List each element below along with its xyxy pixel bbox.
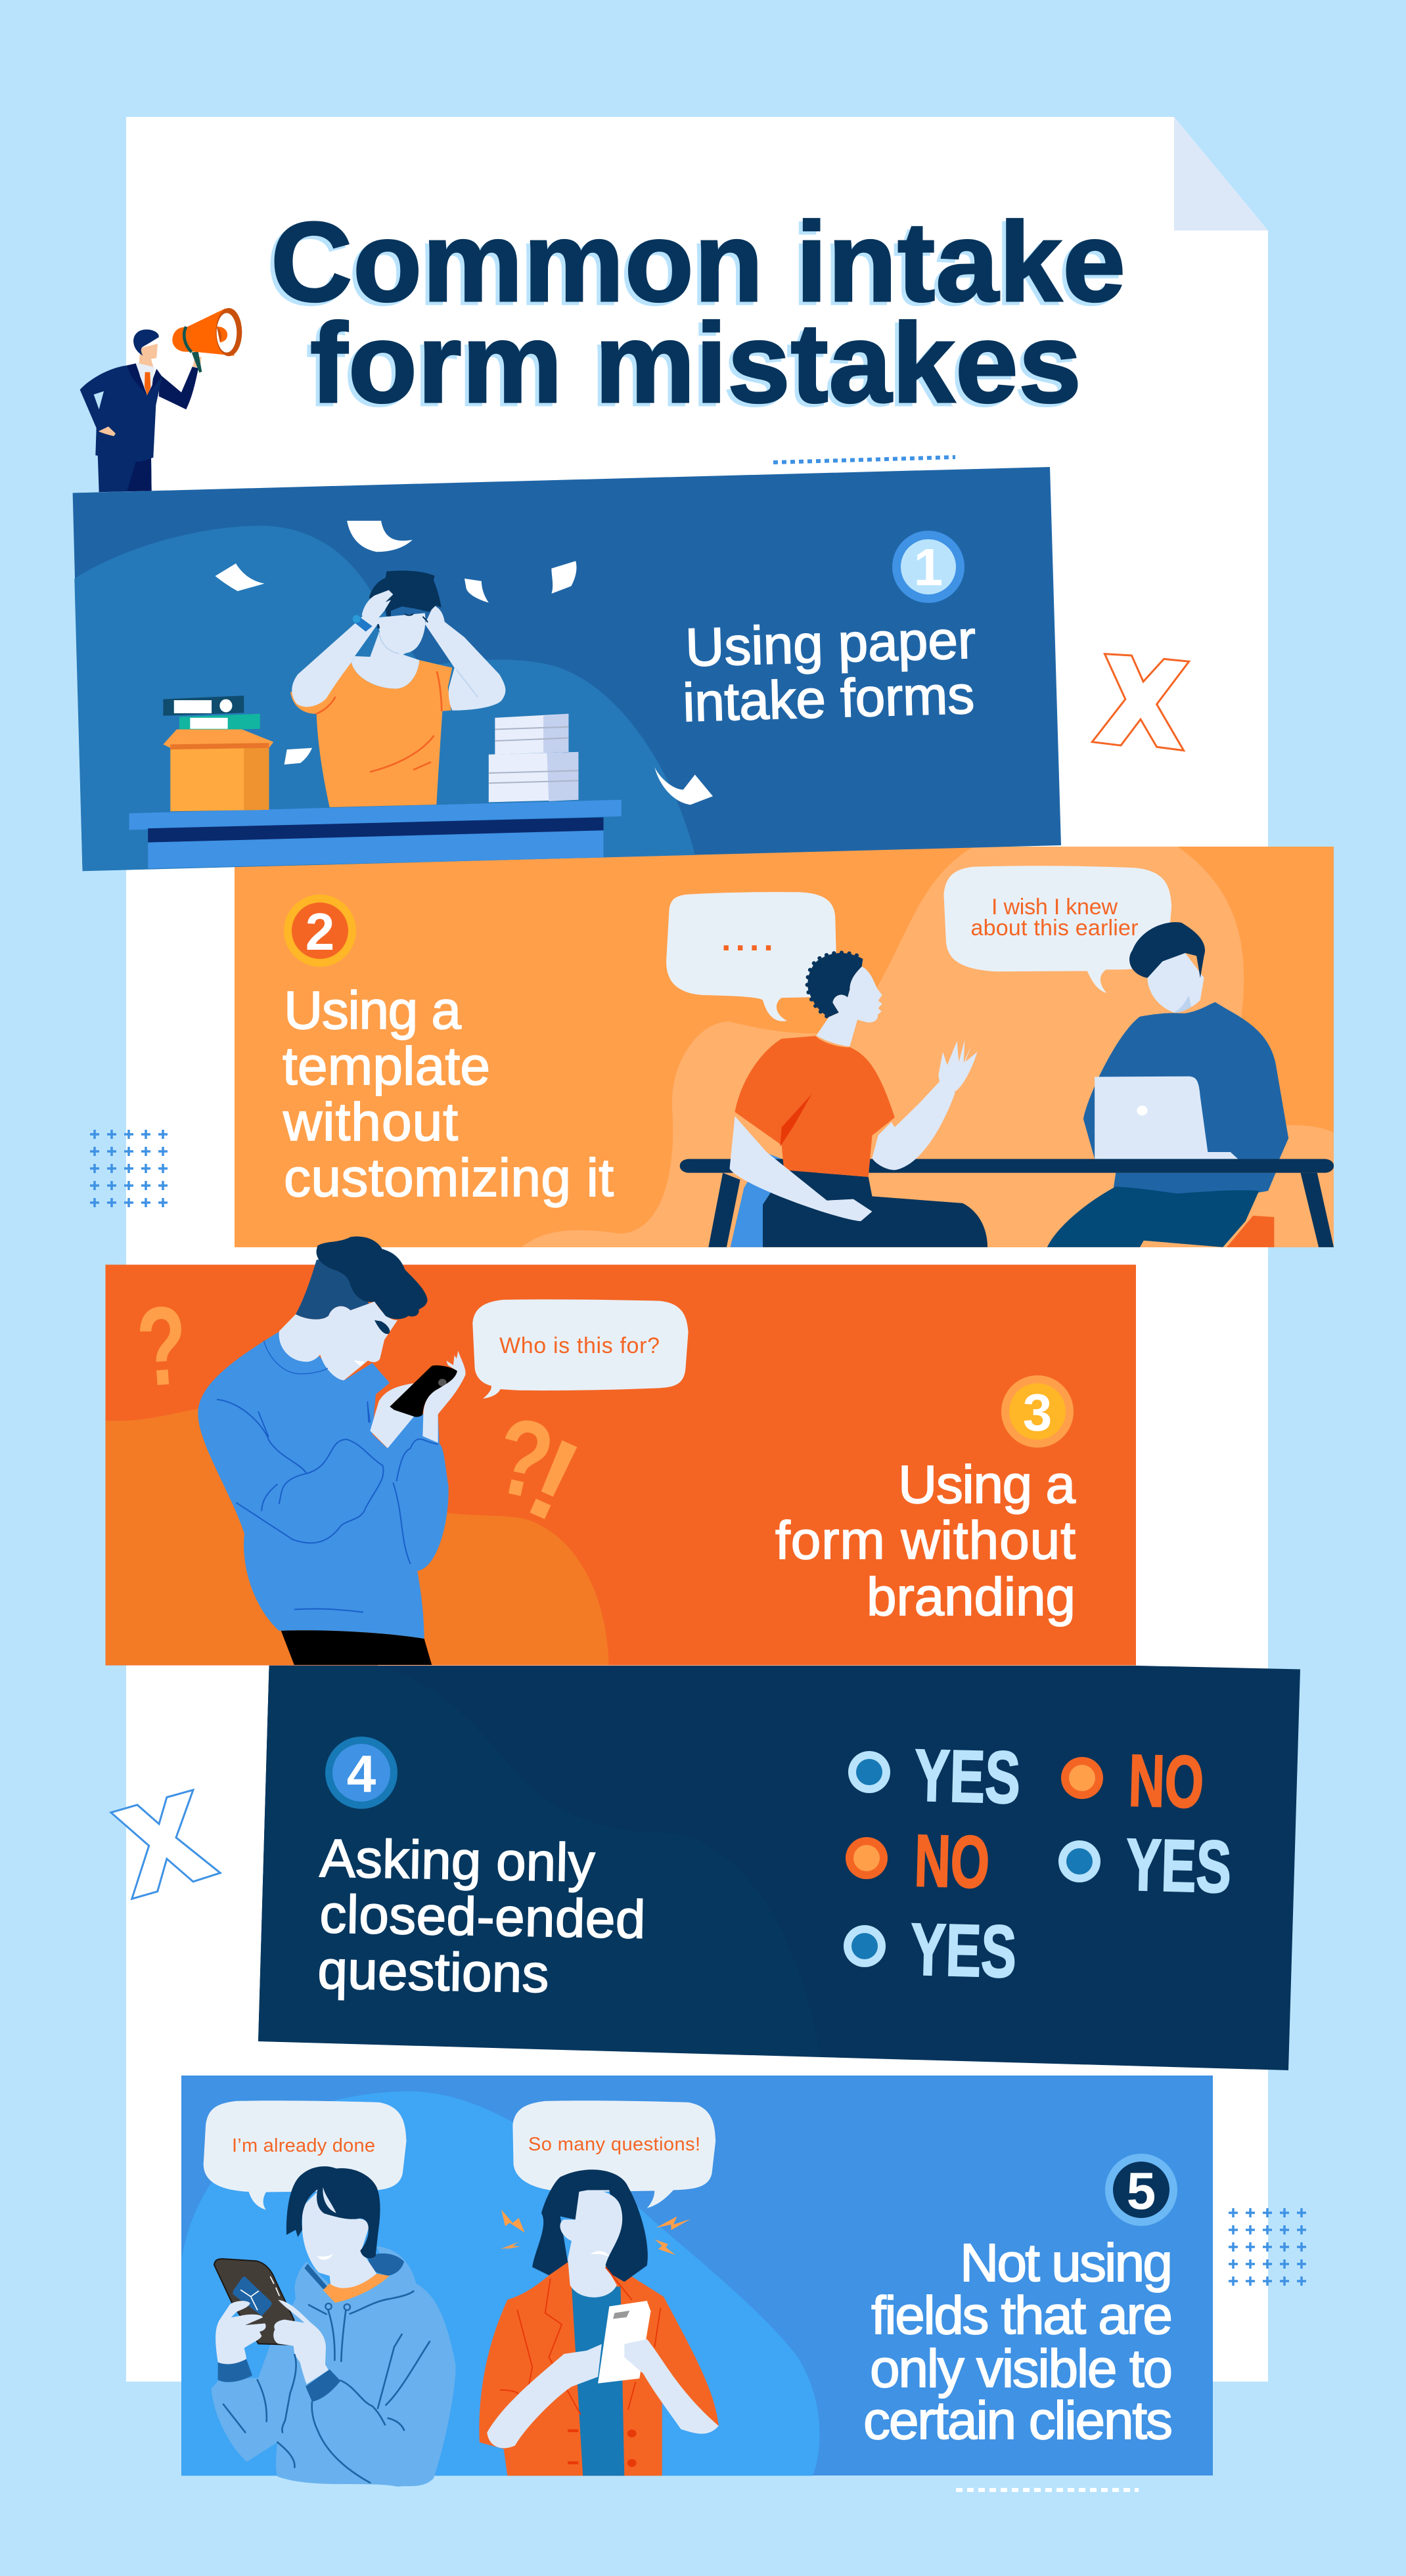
eye and mouth <box>374 1320 390 1334</box>
neck and chest <box>352 633 419 688</box>
number badge 4 <box>325 1737 397 1809</box>
lightning marks <box>500 2210 691 2255</box>
suit <box>80 363 162 462</box>
panel 2 heading: Using a <box>284 981 461 1040</box>
sweater <box>198 1331 449 1639</box>
number badge 3: 3 <box>1023 1383 1052 1442</box>
panel 2 heading: customizing it <box>284 1148 614 1208</box>
megaphone man <box>80 308 242 492</box>
panel 3 illustration <box>106 1299 689 1665</box>
panel 4 heading: closed-ended <box>319 1884 646 1950</box>
panel 2 heading: template <box>283 1036 490 1096</box>
handle <box>192 351 202 372</box>
yes/no options <box>844 1734 1233 1993</box>
panel 3: branding <box>105 1236 1136 1666</box>
watch <box>355 617 373 632</box>
left arm <box>292 615 378 707</box>
yes option 1 <box>848 1734 1022 1819</box>
title <box>267 199 1125 430</box>
right arm <box>425 606 505 711</box>
panel 4 heading: Asking only <box>319 1829 595 1893</box>
left hand <box>370 1383 414 1448</box>
panel 4: closed-ended questions <box>258 1666 1300 2070</box>
raised arm <box>159 366 198 409</box>
face and neck <box>279 1302 397 1381</box>
panel 2 heading <box>283 981 614 1208</box>
panel 5 heading: certain clients <box>863 2391 1173 2451</box>
panel 3 heading: branding <box>867 1567 1076 1627</box>
speech bubble text: I wish I knew: I wish I knew <box>991 895 1118 920</box>
title: form mistakes <box>310 300 1081 426</box>
panel 2 illustration <box>522 847 1334 1247</box>
no option 1: NO <box>1127 1739 1205 1823</box>
collar <box>323 2274 390 2303</box>
megaphone <box>172 308 235 356</box>
panel 4 background <box>258 1666 1300 2070</box>
no option 2 <box>846 1819 991 1903</box>
hair <box>286 2166 380 2258</box>
panel 5: conditional fields <box>181 2076 1213 2487</box>
panel 2 background <box>235 847 1334 1247</box>
number badge 2: 2 <box>306 902 334 961</box>
number badge 5 <box>1105 2154 1177 2226</box>
legs <box>98 453 152 492</box>
panel 3 background <box>105 1265 1136 1666</box>
hair back <box>296 1256 369 1320</box>
panel 1 heading: intake forms <box>682 665 975 733</box>
number badge 3 <box>1001 1375 1074 1448</box>
cardboard box and binders <box>163 696 273 811</box>
cuffs <box>218 2359 340 2402</box>
paper stacks <box>489 714 578 802</box>
head <box>139 344 158 366</box>
panel 1 heading: Using paper <box>685 610 976 678</box>
plus grid right <box>1229 2208 1306 2286</box>
number badge 2 <box>284 895 356 967</box>
question marks: ? <box>133 1283 191 1410</box>
hoodie lines <box>223 2291 430 2483</box>
title: Common intake <box>267 202 1122 328</box>
phone <box>214 2259 294 2345</box>
left hand <box>362 590 393 625</box>
panel 4 heading <box>317 1829 646 2004</box>
sweater folds <box>217 1400 438 1612</box>
orange shirt <box>290 660 452 807</box>
yes option 3 <box>844 1908 1018 1993</box>
right hand <box>422 1351 466 1443</box>
smile <box>317 2254 333 2260</box>
hand <box>99 426 116 436</box>
left hand <box>215 2301 266 2364</box>
panel 3 heading <box>775 1455 1076 1627</box>
panel 3 heading: form without <box>775 1511 1076 1570</box>
shirt and tie <box>136 363 154 395</box>
worried man <box>290 571 505 807</box>
no option 2: NO <box>913 1819 991 1903</box>
face and neck <box>302 2192 376 2289</box>
hair front <box>317 1236 428 1319</box>
right hand <box>273 2300 329 2384</box>
number badge 1: 1 <box>914 538 943 596</box>
number badge 1 <box>892 531 964 603</box>
speech bubbles <box>204 2100 407 2210</box>
panel 1: paper forms <box>73 467 1061 871</box>
speech bubble text: Who is this for? <box>499 1333 660 1358</box>
number badge 4: 4 <box>347 1744 376 1803</box>
yes option 2 <box>1058 1823 1233 1908</box>
no option 1 <box>1061 1739 1205 1823</box>
icon: orange X <box>1092 654 1189 751</box>
yes option 1: YES <box>913 1734 1022 1819</box>
phone <box>390 1366 457 1417</box>
panel 5 illustration <box>181 2091 820 2476</box>
panel 5 heading <box>863 2233 1173 2451</box>
panel 4 blob <box>258 1666 821 2056</box>
face <box>378 613 426 654</box>
panel 5 heading: fields that are <box>871 2286 1173 2345</box>
panel 5 heading: Not using <box>960 2233 1173 2293</box>
shirt creases and eye <box>317 672 442 772</box>
question marks: ? <box>486 1394 563 1523</box>
panel 5 heading: only visible to <box>870 2339 1173 2399</box>
person with hoodie and phone <box>212 2166 455 2487</box>
speech bubble <box>472 1299 689 1398</box>
inner hood <box>304 2254 404 2289</box>
speech bubble text: I'm already done: I’m already done <box>232 2135 375 2156</box>
title: form mistakes <box>306 303 1077 430</box>
person B jacket <box>479 2262 719 2476</box>
panel 5 background <box>181 2076 1213 2476</box>
hoodie <box>212 2246 455 2487</box>
icon: blue X <box>111 1790 220 1899</box>
panel 3 heading: Using a <box>898 1455 1076 1515</box>
yes option 2: YES <box>1125 1823 1233 1908</box>
question marks: ! <box>510 1414 597 1547</box>
speech bubble text: I wish I knew <box>971 895 1138 941</box>
flying papers <box>215 521 713 805</box>
person head, phone and hands <box>264 1236 466 1448</box>
panel 1 background <box>73 467 1061 871</box>
dotted line top <box>773 457 955 462</box>
panel 1 heading <box>682 610 976 733</box>
question marks <box>133 1283 597 1547</box>
plus grid left <box>90 1130 168 1207</box>
speech bubble text: dots: .... <box>721 920 778 958</box>
hair <box>369 571 442 616</box>
desk <box>129 800 622 868</box>
panel 4 heading: questions <box>317 1940 549 2004</box>
pants <box>281 1630 432 1665</box>
yes option 3: YES <box>909 1908 1018 1993</box>
speech bubble text: I wish I knew: about this earlier <box>971 916 1138 941</box>
speech bubble text: So many questions: So many questions! <box>528 2134 700 2155</box>
paper sheet with folded corner <box>126 117 1268 2382</box>
panel 2: template <box>235 847 1334 1247</box>
dotted line bottom <box>956 2488 1139 2492</box>
panel 1 illustration <box>74 521 713 871</box>
title: Common intake <box>271 199 1125 325</box>
seated person head and raised hand <box>807 952 977 1156</box>
number badge 5: 5 <box>1127 2162 1156 2220</box>
panel 2 heading: without <box>283 1092 458 1152</box>
